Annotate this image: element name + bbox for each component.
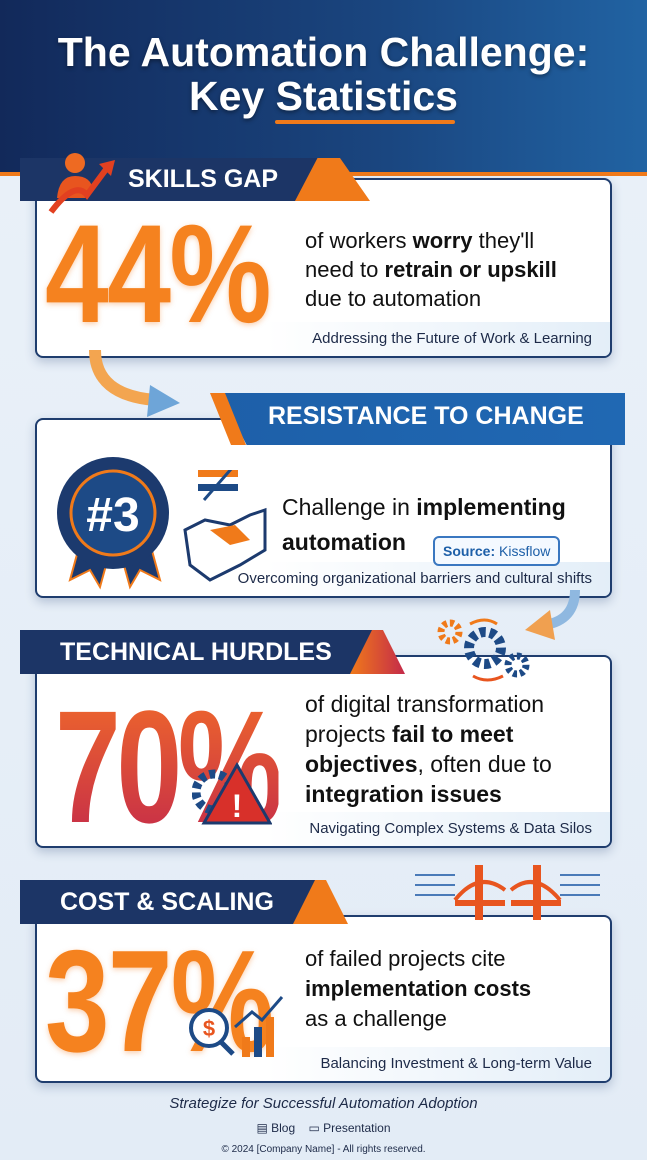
text block xyxy=(305,228,557,311)
title xyxy=(57,29,589,122)
footer caption xyxy=(37,322,610,356)
text block: need to retrain or upskill xyxy=(305,257,557,282)
icon: money chart xyxy=(189,996,283,1057)
panel: skills gap xyxy=(20,153,617,367)
footer caption xyxy=(37,812,610,846)
text block: of workers worry they'll xyxy=(305,228,534,253)
footer caption xyxy=(37,562,610,596)
arrow 1 xyxy=(89,350,180,417)
icon: #3 badge: #3 xyxy=(86,489,140,542)
icon: #3 badge xyxy=(57,457,169,590)
footer caption: Overcoming organizational barriers and cultural shifts xyxy=(238,570,592,587)
footer caption: Addressing the Future of Work & Learning xyxy=(312,330,592,347)
icon: handshake xyxy=(183,470,266,582)
text block: objectives, often due to xyxy=(305,751,552,777)
text block: projects fail to meet xyxy=(305,721,513,747)
text block xyxy=(282,494,566,555)
text block: integration issues xyxy=(305,781,502,807)
icon: broken bridge xyxy=(415,865,600,920)
text block: of failed projects cite xyxy=(305,946,506,971)
stat 44%: 44% xyxy=(45,195,270,352)
arrow 2 xyxy=(525,590,580,640)
footer caption: Balancing Investment & Long-term Value xyxy=(320,1055,592,1072)
header xyxy=(0,0,647,176)
banner xyxy=(20,158,320,201)
footer links: ▤ Blog ▭ Presentation xyxy=(256,1121,391,1135)
text block xyxy=(305,691,552,807)
footer tagline: Strategize for Successful Automation Adoption xyxy=(169,1095,478,1112)
title underline xyxy=(275,120,455,124)
banner accent xyxy=(210,393,246,445)
icon: gears xyxy=(438,618,530,682)
banner title: COST & SCALING xyxy=(60,888,274,916)
footer caption: Navigating Complex Systems & Data Silos xyxy=(309,820,592,837)
source pill xyxy=(433,536,560,566)
panel: cost & scaling xyxy=(20,865,616,1092)
text block: of digital transformation xyxy=(305,691,544,717)
banner accent xyxy=(295,158,370,201)
icon: person with arrow xyxy=(48,153,115,214)
copyright: © 2024 [Company Name] - All rights reserved. xyxy=(221,1144,426,1155)
panel: technical hurdles xyxy=(20,618,616,856)
text block: Challenge in implementing xyxy=(282,494,566,520)
icon: money chart: $ xyxy=(203,1016,215,1041)
title: The Automation Challenge: xyxy=(58,29,589,75)
stat 37%: 37% xyxy=(45,920,272,1082)
text block: automation xyxy=(282,529,406,555)
banner title: RESISTANCE TO CHANGE xyxy=(268,402,584,430)
banner xyxy=(20,880,320,924)
banner title: TECHNICAL HURDLES xyxy=(60,638,332,666)
icon: gear warning: ! xyxy=(232,788,242,824)
banner title: SKILLS GAP xyxy=(128,165,278,193)
stat 70%: 70% xyxy=(55,677,279,856)
banner accent xyxy=(350,630,405,674)
text block: implementation costs xyxy=(305,976,531,1001)
text block xyxy=(305,946,531,1031)
banner accent xyxy=(293,880,348,924)
text block: as a challenge xyxy=(305,1006,447,1031)
title: Key Statistics xyxy=(189,73,458,119)
source pill: Source: Kissflow xyxy=(443,543,550,559)
panel: resistance to change xyxy=(30,393,625,607)
text block: due to automation xyxy=(305,286,481,311)
banner xyxy=(185,393,625,445)
icon: gear warning xyxy=(192,762,272,824)
banner xyxy=(20,630,380,674)
footer caption xyxy=(37,1047,610,1081)
